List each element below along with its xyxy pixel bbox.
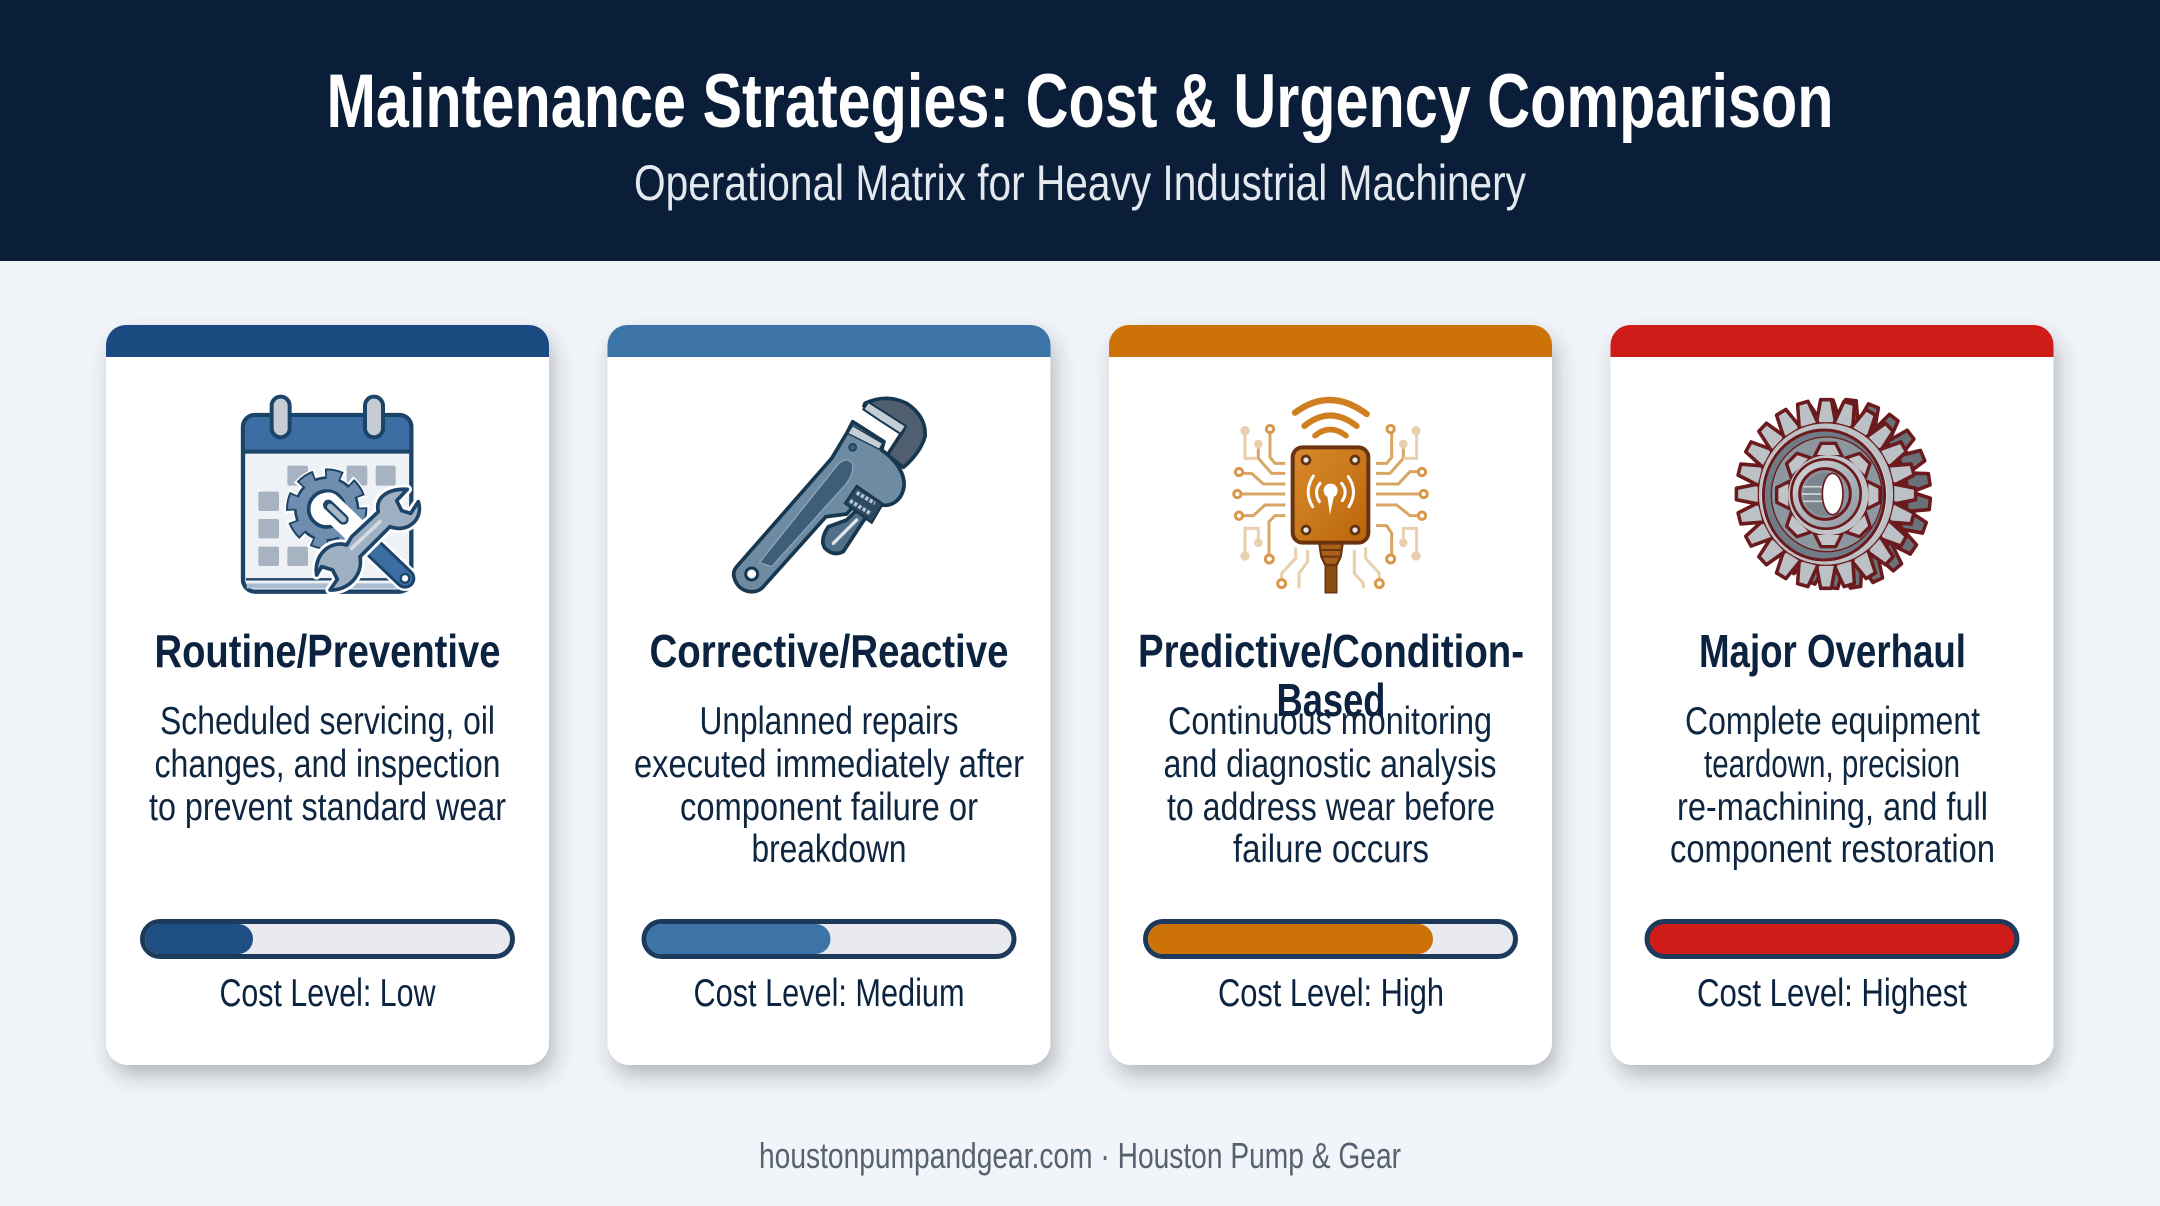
footer source line: houstonpumpandgear.com · Houston Pump & Gear: [759, 1135, 1401, 1176]
panel: predictive/condition-based: [1109, 325, 1552, 1065]
description: Continuous monitoring: [1168, 700, 1492, 743]
cost label: Cost Level: High: [1218, 972, 1444, 1015]
cost bar: highest: [1647, 922, 2017, 956]
header band: [0, 0, 2160, 261]
heading: [1138, 625, 1524, 726]
description: teardown, precision: [1704, 743, 1960, 786]
heading: Predictive/Condition-: [1138, 625, 1524, 677]
description: component failure or: [680, 786, 978, 829]
cost label: Cost Level: Low: [220, 972, 436, 1015]
description: executed immediately after: [634, 743, 1024, 786]
description: re-machining, and full: [1677, 786, 1988, 829]
cost label: Cost Level: Medium: [694, 972, 964, 1015]
description: to address wear before: [1167, 786, 1495, 829]
icon: gear: [1736, 390, 1939, 598]
panel: major overhaul: [1610, 325, 2054, 1065]
description: Complete equipment: [1685, 700, 1980, 743]
cost bar: low: [142, 922, 512, 956]
description: [149, 700, 506, 829]
heading: Based: [1276, 674, 1386, 726]
description: [634, 700, 1024, 871]
cost bar: high: [1146, 922, 1516, 956]
heading: Corrective/Reactive: [650, 625, 1008, 677]
description: Unplanned repairs: [700, 700, 958, 743]
description: changes, and inspection: [154, 743, 500, 786]
heading: Routine/Preventive: [154, 625, 500, 677]
icon: wireless sensor with circuit traces: [1234, 400, 1427, 593]
icon: pipe wrench: [734, 398, 925, 592]
panel: corrective/reactive: [608, 325, 1050, 1065]
description: and diagnostic analysis: [1164, 743, 1496, 786]
heading: Major Overhaul: [1699, 625, 1966, 677]
description: [1164, 700, 1496, 871]
cost label: Cost Level: Highest: [1697, 972, 1967, 1015]
subtitle: Operational Matrix for Heavy Industrial Machinery: [634, 155, 1526, 211]
description: failure occurs: [1233, 828, 1429, 871]
description: breakdown: [752, 828, 906, 871]
panel: routine/preventive: [106, 325, 549, 1065]
icon: calendar with gear and wrench: [243, 397, 419, 592]
description: component restoration: [1670, 828, 1995, 871]
description: Scheduled servicing, oil: [160, 700, 495, 743]
description: to prevent standard wear: [149, 786, 506, 829]
description: [1670, 700, 1995, 871]
cost bar: medium: [644, 922, 1014, 956]
